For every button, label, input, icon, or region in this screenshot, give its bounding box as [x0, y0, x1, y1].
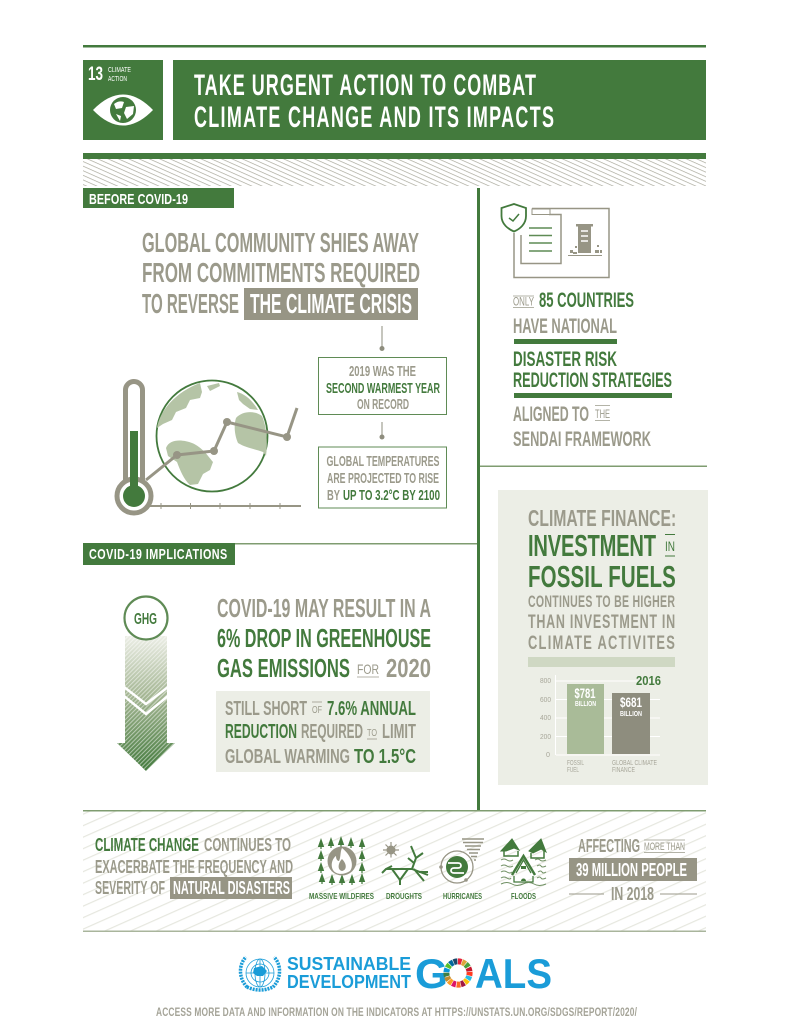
callout: affecting more than 39 million people: IN 2018 [611, 884, 654, 904]
heading: global community: FROM COMMITMENTS REQUIRED [142, 257, 420, 288]
text block: national disaster risk reduction strategies: THE [595, 407, 610, 421]
icon: SDG colour wheel [442, 957, 474, 989]
text block: national disaster risk reduction strategies: DISASTER RISK [513, 348, 617, 371]
callout: second warmest year [318, 358, 446, 414]
heading: global community: THE CLIMATE CRISIS [250, 288, 412, 319]
callout: affecting more than 39 million people: 39 MILLION PEOPLE [576, 860, 687, 880]
callout: projected temperatures: GLOBAL TEMPERATURES [326, 453, 440, 470]
callout: still short of 7.6% annual reduction [216, 691, 430, 772]
callout: projected temperatures: ARE PROJECTED TO RISE [327, 470, 439, 487]
text block: 6% drop in greenhouse gas emissions: 6% DROP IN GREENHOUSE [217, 623, 431, 653]
callout: affecting more than 39 million people: AFFECTING [578, 836, 640, 856]
globe [156, 380, 268, 492]
text block: 6% drop in greenhouse gas emissions [217, 593, 431, 683]
badge: SDG 13 climate action: CLIMATE [108, 67, 131, 74]
label: droughts: DROUGHTS [386, 891, 422, 901]
logo: Sustainable Development Goals [287, 950, 552, 997]
text block: natural disasters: NATURAL DISASTERS [173, 878, 290, 898]
icon: droughts [382, 842, 428, 885]
panel: climate finance: FOSSIL FUELS [528, 559, 676, 594]
label: hurricanes: HURRICANES [443, 891, 482, 901]
callout: projected temperatures: UP TO 3.2°C BY 2100 [343, 487, 440, 504]
arrow: connector to projected temperatures [380, 422, 384, 440]
logo: Sustainable Development Goals: ALS [475, 950, 552, 997]
callout: affecting more than 39 million people [569, 836, 697, 904]
label: massive wildfires: MASSIVE WILDFIRES [309, 891, 374, 901]
section label: before COVID-19: BEFORE COVID-19 [89, 190, 188, 207]
icon: GHG down arrow: GHG [134, 611, 157, 628]
bar chart: fossil fuel vs global climate finance: FOSSIL [567, 760, 584, 767]
icon: hurricanes [439, 839, 484, 883]
footer: data source: ACCESS MORE DATA AND INFORMATION ON THE INDICATORS AT HTTPS://UNSTATS.UN.ORG/SDGS/REPORT/2020/ [156, 1007, 637, 1019]
callout: still short of 7.6% annual reduction: LIMIT [382, 721, 416, 743]
section label: before COVID-19 [83, 188, 234, 208]
thermometer [117, 382, 151, 513]
bar chart: fossil fuel vs global climate finance: 200 [540, 734, 551, 741]
callout: still short of 7.6% annual reduction: GLOBAL WARMING [225, 746, 350, 768]
text block: national disaster risk reduction strategies: HAVE NATIONAL [513, 315, 617, 338]
bar chart: fossil fuel vs global climate finance: 2016 [636, 673, 661, 688]
bar chart: fossil fuel vs global climate finance: $681 [620, 694, 642, 710]
callout: projected temperatures: BY [327, 487, 340, 504]
heading: global community [142, 227, 420, 320]
title banner [173, 60, 706, 140]
panel: climate finance: IN [665, 538, 675, 554]
callout: still short of 7.6% annual reduction: TO [367, 728, 377, 739]
section label: COVID-19 implications: COVID-19 IMPLICATIONS [89, 545, 227, 562]
bar chart: fossil fuel vs global climate finance [540, 673, 661, 774]
text block: 6% drop in greenhouse gas emissions: COVID-19 MAY RESULT IN A [217, 593, 431, 623]
text block: 6% drop in greenhouse gas emissions: 2020 [386, 653, 431, 683]
logo: United Nations emblem [240, 957, 280, 990]
text block: 6% drop in greenhouse gas emissions: FOR [357, 661, 379, 677]
bar chart: fossil fuel vs global climate finance: 800 [540, 678, 551, 685]
illustration: globe, thermometer and temperature chart [117, 380, 301, 513]
heading: global community: TO REVERSE [142, 288, 239, 319]
text block: national disaster risk reduction strategies [513, 289, 672, 451]
logo: Sustainable Development Goals: SUSTAINABLE [287, 954, 411, 974]
text block: natural disasters [95, 835, 293, 899]
bar chart: fossil fuel vs global climate finance: $781 [574, 685, 596, 701]
callout: second warmest year: SECOND WARMEST YEAR [326, 380, 440, 397]
bar chart: fossil fuel vs global climate finance: GLOBAL CLIMATE [612, 760, 657, 767]
panel: climate finance: INVESTMENT [528, 528, 656, 563]
bar chart: fossil fuel vs global climate finance: BILLION [575, 701, 596, 708]
bar chart: fossil fuel vs global climate finance: 400 [540, 715, 551, 722]
icon: GHG down arrow [117, 596, 175, 771]
panel: climate finance: CLIMATE ACTIVITES [528, 633, 675, 654]
callout: affecting more than 39 million people: MORE THAN [644, 841, 685, 853]
panel: climate finance: CLIMATE FINANCE: [528, 506, 676, 532]
heading: global community: GLOBAL COMMUNITY SHIES AWAY [142, 227, 419, 258]
text block: natural disasters: CLIMATE CHANGE [95, 835, 199, 855]
text block: natural disasters: SEVERITY OF [95, 878, 165, 898]
text block: 6% drop in greenhouse gas emissions: GAS EMISSIONS [217, 653, 350, 683]
line chart [146, 408, 301, 509]
bar chart: fossil fuel vs global climate finance: BILLION [620, 711, 642, 718]
logo: Sustainable Development Goals: G [415, 950, 448, 997]
panel: climate finance [498, 490, 708, 785]
panel: climate finance: CONTINUES TO BE HIGHER [528, 591, 675, 611]
logo: Sustainable Development Goals: DEVELOPMENT [287, 972, 411, 992]
bar chart: fossil fuel vs global climate finance: FINANCE [612, 767, 635, 774]
title banner: TAKE URGENT ACTION TO COMBAT [194, 70, 536, 102]
title banner: CLIMATE CHANGE AND ITS IMPACTS [194, 102, 554, 134]
callout: second warmest year: ON RECORD [357, 396, 409, 413]
text block: national disaster risk reduction strategies: 85 COUNTRIES [539, 289, 634, 312]
badge: SDG 13 climate action: ACTION [108, 76, 127, 83]
text block: national disaster risk reduction strategies: REDUCTION STRATEGIES [513, 369, 672, 392]
callout: projected temperatures [318, 447, 446, 508]
bar chart: fossil fuel vs global climate finance: 0 [546, 752, 550, 759]
text block: national disaster risk reduction strategies: SENDAI FRAMEWORK [513, 428, 651, 451]
callout: still short of 7.6% annual reduction: REQUIRED [301, 721, 363, 743]
bar chart: fossil fuel vs global climate finance: FUEL [567, 767, 579, 774]
callout: still short of 7.6% annual reduction: STILL SHORT [225, 698, 307, 720]
badge: SDG 13 climate action: 13 [88, 64, 103, 85]
text block: natural disasters: CONTINUES TO [204, 835, 291, 855]
text block: national disaster risk reduction strategies: ONLY [513, 294, 534, 308]
callout: still short of 7.6% annual reduction: 7.6% ANNUAL [327, 698, 416, 720]
label: floods: FLOODS [511, 891, 536, 901]
callout: still short of 7.6% annual reduction: TO 1.5°C [354, 746, 416, 768]
bar chart: fossil fuel vs global climate finance: 600 [540, 697, 551, 704]
text block: national disaster risk reduction strategies: ALIGNED TO [513, 403, 589, 426]
icon: massive wildfires [318, 836, 365, 885]
callout: second warmest year: 2019 WAS THE [349, 363, 416, 380]
icon: floods [501, 839, 546, 886]
callout: still short of 7.6% annual reduction: REDUCTION [225, 721, 297, 743]
icon: strategy document with shield and building [502, 204, 609, 278]
callout: still short of 7.6% annual reduction: OF [312, 705, 322, 716]
badge: SDG 13 climate action [83, 60, 163, 140]
arrow: connector to warmest year [380, 326, 384, 351]
text block: natural disasters: EXACERBATE THE FREQUENCY AND [95, 857, 293, 877]
panel: climate finance: THAN INVESTMENT IN [528, 611, 675, 633]
